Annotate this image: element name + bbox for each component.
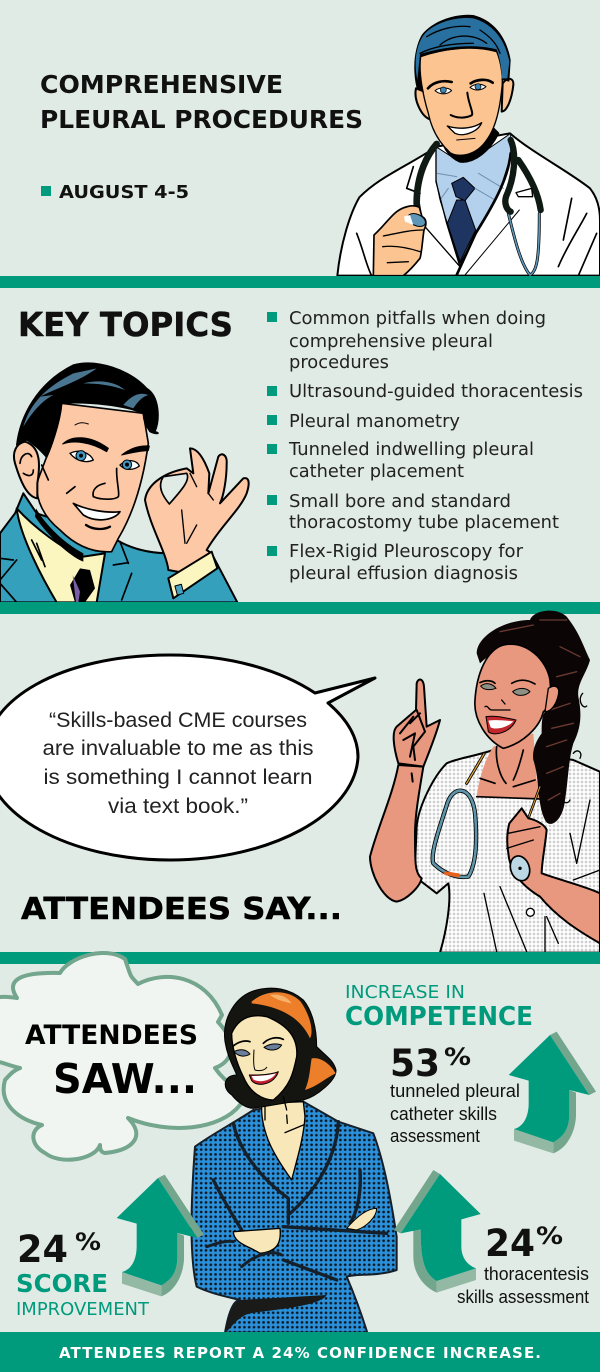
heading: increase in competence — [345, 982, 533, 1032]
panel: key topics — [0, 305, 583, 602]
heading: increase in competence: COMPETENCE — [345, 1002, 533, 1032]
speech bubble with quote: via text book.” — [108, 794, 248, 818]
panel: attendees say — [0, 611, 600, 953]
topic 6 — [267, 542, 524, 584]
topic 6: pleural effusion diagnosis — [289, 564, 518, 584]
arrow: score up — [117, 1175, 204, 1296]
section bar — [0, 952, 600, 964]
stat: 24 percent thoracentesis: skills assessment — [457, 1287, 589, 1307]
section bar — [0, 602, 600, 614]
title: PLEURAL PROCEDURES — [40, 105, 363, 134]
topic 4: Tunneled indwelling pleural — [288, 440, 534, 460]
stat: 24 percent thoracentesis: thoracentesis — [484, 1264, 589, 1284]
stat: 24 percent thoracentesis — [457, 1222, 589, 1307]
topic 5: thoracostomy tube placement — [289, 513, 559, 533]
footer banner — [0, 1332, 600, 1372]
topic 1: comprehensive pleural — [289, 332, 493, 352]
panel: header — [40, 15, 600, 276]
thought cloud with heading: SAW... — [53, 1055, 197, 1103]
footer banner: ATTENDEES REPORT A 24% CONFIDENCE INCREASE. — [59, 1344, 541, 1362]
stat: 24 percent score improvement: % — [75, 1228, 101, 1256]
speech bubble with quote: are invaluable to me as this — [42, 736, 314, 760]
topic 4: catheter placement — [289, 462, 464, 482]
stat: 24 percent thoracentesis: 24 — [485, 1222, 535, 1265]
panel: attendees saw — [0, 953, 596, 1333]
title: COMPREHENSIVE — [40, 70, 283, 99]
stat: 24 percent score improvement — [16, 1228, 150, 1320]
stat: 53 percent: assessment — [390, 1126, 480, 1146]
thought cloud with heading — [0, 953, 243, 1160]
heading: key topics: KEY TOPICS — [18, 305, 233, 344]
topic 2: Ultrasound-guided thoracentesis — [289, 382, 583, 402]
title — [40, 70, 363, 134]
speech bubble with quote — [0, 655, 375, 860]
stat: 24 percent score improvement: SCORE — [16, 1269, 108, 1298]
date with bullet: AUGUST 4-5 — [59, 182, 189, 203]
illustration: nurse pointing upward — [370, 611, 600, 953]
section bar — [0, 276, 600, 288]
stat: 53 percent — [390, 1042, 520, 1146]
topic 4 — [267, 440, 534, 482]
thought cloud with heading: ATTENDEES — [25, 1020, 198, 1051]
topic 5: Small bore and standard — [289, 492, 511, 512]
speech bubble with quote: “Skills-based CME courses — [49, 708, 307, 732]
illustration: doctor with stethoscope — [337, 15, 600, 276]
stat: 24 percent thoracentesis: % — [536, 1222, 563, 1250]
stat: 53 percent: % — [444, 1043, 471, 1071]
stat: 24 percent score improvement: IMPROVEMENT — [16, 1299, 150, 1320]
speech bubble with quote: is something I cannot learn — [44, 765, 312, 789]
topics list — [267, 309, 583, 584]
stat: 53 percent: 53 — [390, 1042, 440, 1085]
topic 3: Pleural manometry — [289, 412, 460, 432]
heading: increase in competence: INCREASE IN — [345, 982, 465, 1003]
topic 5 — [267, 492, 559, 533]
arrow: competence up — [509, 1032, 596, 1153]
illustration: man making OK gesture — [0, 363, 249, 602]
stat: 24 percent score improvement: 24 — [17, 1228, 68, 1271]
stat: 53 percent: tunneled pleural — [390, 1081, 520, 1101]
arrow: thoracentesis up — [394, 1170, 481, 1293]
topic 1: Common pitfalls when doing — [289, 309, 546, 329]
topic 6: Flex-Rigid Pleuroscopy for — [289, 542, 524, 562]
illustration: businesswoman with arms crossed — [191, 988, 397, 1333]
stat: 53 percent: catheter skills — [390, 1104, 497, 1124]
heading: attendees say: ATTENDEES SAY... — [21, 892, 342, 927]
topic 1 — [267, 309, 546, 373]
topic 1: procedures — [289, 353, 389, 373]
